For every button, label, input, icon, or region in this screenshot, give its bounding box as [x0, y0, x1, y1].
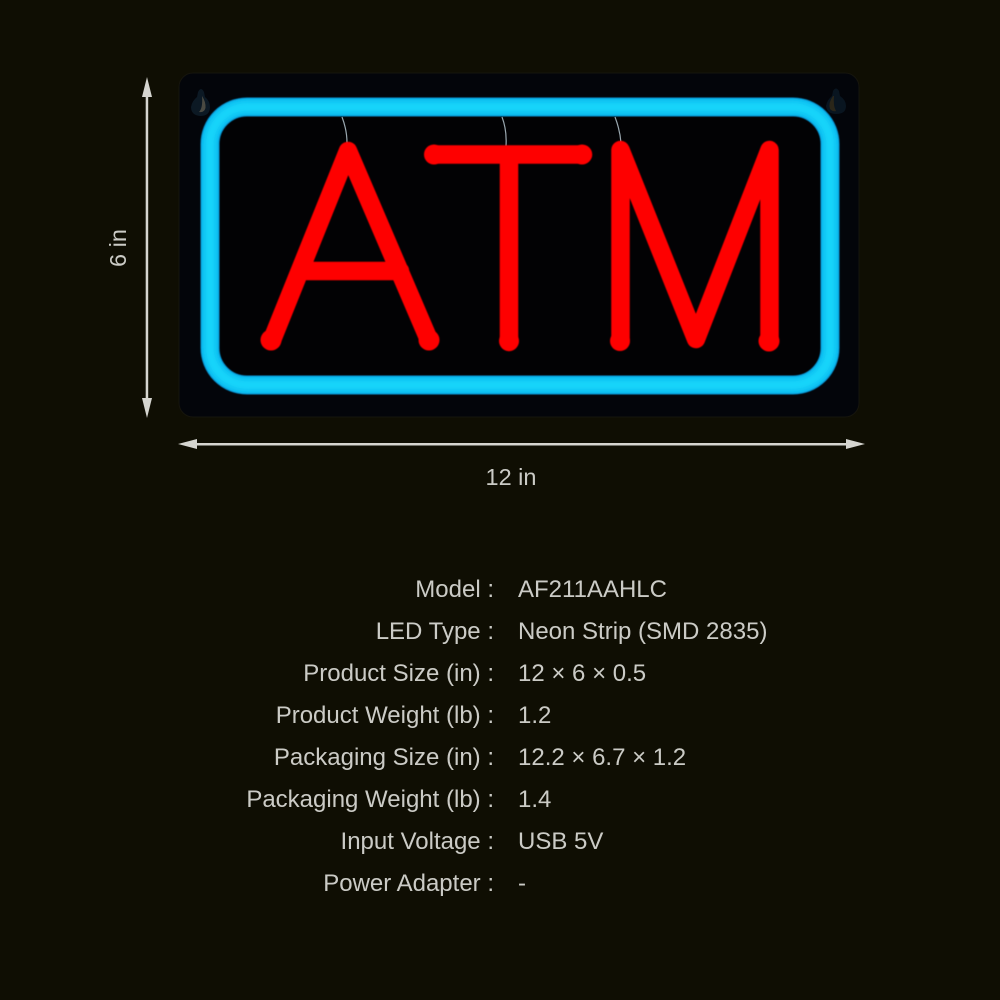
row: LED type: Neon Strip (SMD 2835): [518, 618, 767, 645]
row: LED type: LED Type :: [376, 618, 494, 645]
row: LED type: [376, 618, 767, 645]
row: packaging size: Packaging Size (in) :: [274, 744, 494, 771]
letter T: [424, 144, 592, 351]
row: product size: 12 × 6 × 0.5: [518, 660, 646, 687]
row: model: [415, 576, 667, 603]
row: power adapter: Power Adapter :: [323, 870, 494, 897]
row: packaging size: [274, 744, 686, 771]
specification table: [246, 576, 767, 897]
row: packaging size: 12.2 × 6.7 × 1.2: [518, 744, 686, 771]
row: product size: [303, 660, 646, 687]
row: packaging weight: 1.4: [518, 786, 551, 813]
row: product weight: 1.2: [518, 702, 551, 729]
row: product weight: Product Weight (lb) :: [276, 702, 494, 729]
sign backing board: [179, 73, 859, 417]
neon letters: ATM: [260, 144, 780, 352]
board interior: [219, 116, 821, 377]
row: product size: Product Size (in) :: [303, 660, 494, 687]
row: input voltage: Input Voltage :: [341, 828, 494, 855]
thin wires: [342, 117, 621, 146]
arrow: height dimension: [142, 77, 152, 418]
row: packaging weight: Packaging Weight (lb) :: [246, 786, 494, 813]
row: input voltage: [341, 828, 603, 855]
panel: neon sign: [179, 73, 859, 417]
arrow: width dimension: [178, 439, 865, 449]
row: model: Model :: [415, 576, 494, 603]
letter M: [610, 150, 780, 352]
neon frame: [210, 107, 830, 385]
row: power adapter: -: [518, 870, 526, 897]
row: model: AF211AAHLC: [518, 576, 667, 603]
row: input voltage: USB 5V: [518, 828, 603, 855]
icon: left mounting hole: [191, 89, 210, 116]
label: 6 in: 6 in: [105, 229, 131, 267]
letter A: [260, 151, 440, 350]
label: 12 in: 12 in: [486, 464, 536, 490]
icon: right mounting hole: [826, 88, 846, 114]
